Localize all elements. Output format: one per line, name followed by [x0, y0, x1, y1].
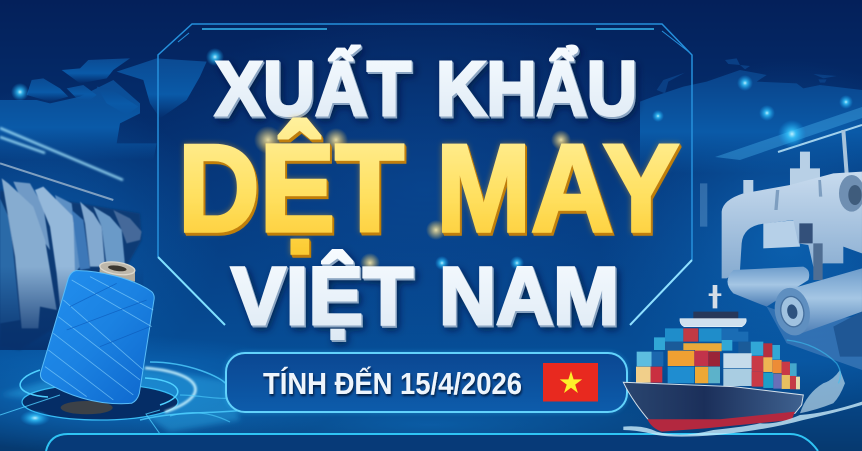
light sparks — [11, 48, 853, 273]
bow wave — [623, 402, 862, 437]
ship mast — [680, 285, 746, 327]
sewing machine — [700, 130, 862, 280]
title: việt nam: VIỆT — [231, 251, 413, 342]
containers — [636, 328, 800, 389]
title: dệt may: MAY — [436, 120, 679, 258]
hull waterline — [647, 412, 795, 432]
date text: TÍNH ĐẾN 15/4/2026 — [263, 366, 522, 401]
icon: Vietnam flag — [543, 363, 598, 402]
ship hull — [623, 382, 803, 427]
shirts — [0, 178, 142, 328]
yarn spool — [40, 260, 154, 414]
light beams — [0, 107, 862, 180]
title: dệt may — [178, 119, 679, 258]
title: việt nam — [231, 251, 619, 342]
world map left — [0, 58, 207, 160]
fabric rolls — [727, 267, 862, 370]
date pill — [226, 353, 627, 412]
cargo ship — [623, 285, 862, 437]
world map right — [640, 58, 862, 173]
water and swirls left — [0, 362, 262, 434]
clothes rack — [0, 163, 143, 350]
title: xuất khẩu — [215, 44, 637, 132]
bottom panel — [46, 434, 818, 451]
frame — [158, 24, 692, 325]
title: việt nam: NAM — [439, 251, 619, 342]
title: xuất khẩu: KHẨU — [436, 45, 637, 132]
title: dệt may: DỆT — [178, 119, 404, 258]
title: xuất khẩu: XUẤT — [215, 44, 411, 132]
